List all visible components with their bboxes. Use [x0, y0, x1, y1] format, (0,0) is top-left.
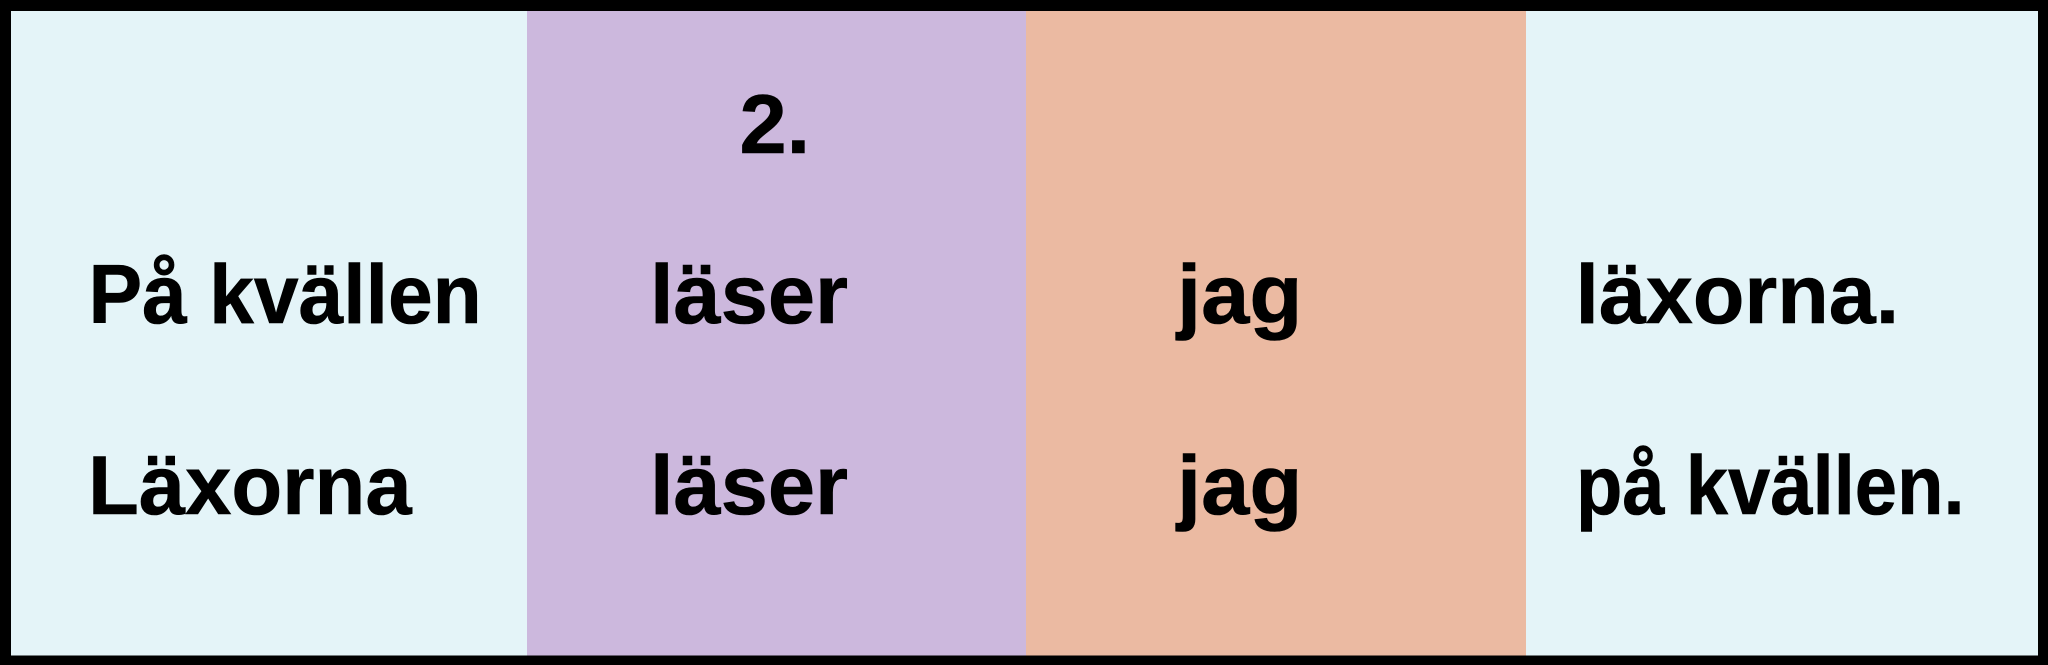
panel: subject column [1026, 11, 1526, 656]
sentence 2: subject: jag [1175, 440, 1302, 533]
panel: first column [11, 11, 527, 656]
sentence 1: object: läxorna. [1576, 248, 1899, 341]
panel: verb column [527, 11, 1026, 656]
sentence 2 [88, 439, 1965, 533]
heading: position 2: 2. [740, 78, 810, 171]
sentence 1: subject: jag [1175, 249, 1302, 342]
sentence 2: first position: Läxorna [88, 439, 412, 532]
panel: last column [1526, 11, 2038, 656]
sentence 2: verb: läser [650, 439, 848, 532]
sentence 1: first position: På kvällen [88, 249, 482, 341]
sentence 2: adverbial: på kvällen. [1576, 439, 1965, 532]
sentence 1 [88, 248, 1899, 342]
sentence 1: verb: läser [650, 248, 848, 341]
